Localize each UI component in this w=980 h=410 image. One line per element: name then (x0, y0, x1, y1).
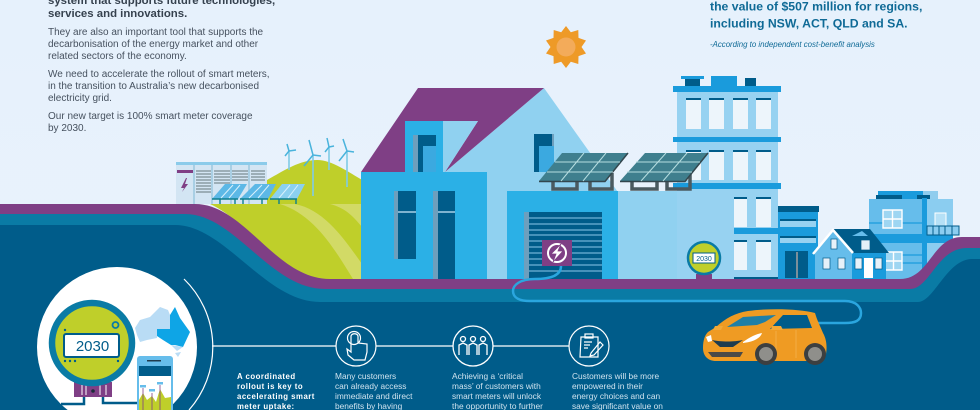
icon: group of people (453, 326, 493, 366)
icon: hand pointing (336, 326, 376, 366)
connector lines (184, 279, 569, 410)
electric car (703, 309, 827, 365)
solar farm panels (212, 184, 305, 204)
text block: critical mass: smart meters will unlock (452, 391, 542, 401)
Australia map (135, 307, 190, 357)
text block: customer benefits (335, 371, 413, 410)
smartphone (137, 356, 173, 410)
text block: coordinated rollout (237, 372, 315, 410)
wind turbines (285, 138, 354, 196)
rooftop solar panels (539, 153, 708, 189)
text block: smart meter introduction: in the transition to Australia’s new decarbonised (48, 81, 259, 92)
icon: small smart meter: 2030 (696, 256, 712, 263)
charging cable (513, 266, 861, 323)
text block: smart meter introduction: electricity grid. (48, 93, 112, 104)
garage (507, 191, 618, 279)
mid-rise blue building (778, 206, 819, 279)
text block: empowered customers: energy choices and can (572, 391, 660, 401)
smart meter: 2030 (76, 338, 109, 355)
text block: critical mass (452, 371, 543, 410)
text block: smart meter introduction (48, 0, 275, 134)
text block: smart meter introduction: related sectors of the economy. (48, 51, 187, 62)
text block: critical mass: mass’ of customers with (452, 381, 541, 391)
icon: sun (546, 26, 586, 68)
front door (433, 191, 438, 279)
white circle with smart meter (37, 267, 197, 410)
text block: regional value callout (710, 0, 922, 49)
text block: smart meter introduction: They are also an important tool that supports the (48, 27, 264, 38)
icon: small smart meter (688, 242, 720, 280)
house with purple roof (361, 88, 620, 279)
front windows (394, 191, 398, 259)
text block: smart meter introduction: services and innovations. (48, 8, 187, 20)
dormer (405, 121, 443, 172)
text block: smart meter introduction: decarbonisation of the energy market and other (48, 39, 259, 50)
smart meter (52, 303, 140, 404)
farmland hills (210, 204, 362, 282)
text block: coordinated rollout: A coordinated (237, 372, 296, 381)
icon: clipboard and pen (569, 326, 609, 366)
text block: customer benefits: immediate and direct (335, 391, 413, 401)
gable window (534, 134, 554, 172)
right block of flats (869, 191, 959, 279)
text block: smart meter introduction: by 2030. (48, 123, 86, 134)
roof (361, 88, 544, 172)
battery storage facility (176, 162, 267, 204)
hill with wind turbines (267, 138, 364, 210)
text block: regional value callout: -According to independent cost-benefit analysis (710, 40, 875, 49)
text block: smart meter introduction: We need to accelerate the rollout of smart meters, (48, 69, 270, 80)
text block: coordinated rollout: rollout is key to (237, 382, 303, 391)
text block: customer benefits: can already access (335, 381, 406, 391)
text block: critical mass: Achieving a ‘critical (452, 371, 523, 381)
small house (813, 229, 889, 279)
wheels (755, 343, 826, 365)
text block: regional value callout: including NSW, ACT, QLD and SA. (710, 16, 908, 30)
text block: coordinated rollout: accelerating smart (237, 392, 315, 401)
icon: garage charging sign (542, 240, 572, 266)
text block: empowered customers (572, 371, 663, 410)
ground layers (0, 204, 980, 410)
tall apartment building (618, 76, 781, 279)
text block: empowered customers: empowered in their (572, 381, 643, 391)
text block: smart meter introduction: Our new target is 100% smart meter coverage (48, 111, 253, 122)
text block: customer benefits: Many customers (335, 371, 396, 381)
text block: empowered customers: Customers will be more (572, 371, 660, 381)
